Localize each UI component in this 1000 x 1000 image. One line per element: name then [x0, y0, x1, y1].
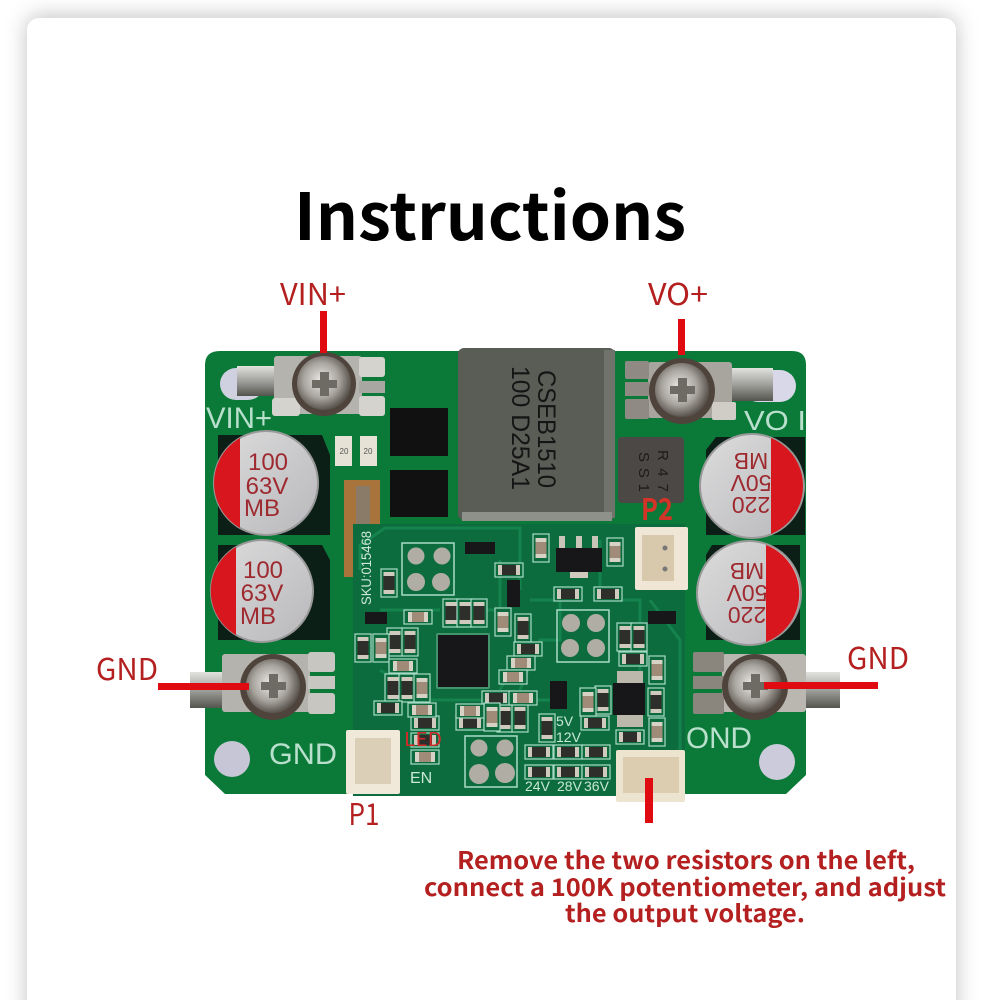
capacitor 100uF bottom: MB — [240, 603, 276, 630]
board voltage labels: 36V — [584, 778, 610, 794]
capacitor 100uF top: MB — [244, 495, 280, 522]
main inductor: 100 D25A1 — [506, 366, 534, 490]
pointer lines — [158, 311, 878, 823]
small resistors — [335, 436, 377, 466]
capacitor 220uF bottom: MB — [730, 558, 764, 584]
top-right screw terminal — [625, 358, 773, 424]
regulator — [556, 536, 602, 578]
copper traces — [360, 528, 680, 760]
bottom-right screw terminal — [693, 652, 840, 720]
note text: connect a 100K potentiometer, and adjust — [424, 868, 946, 903]
capacitor 100uF top: 63V — [246, 473, 288, 500]
top-left screw terminal — [237, 352, 385, 416]
SMD capacitors — [373, 534, 665, 764]
note text: Remove the two resistors on the left, — [457, 841, 915, 876]
daughter board — [353, 524, 685, 796]
connector bottom — [616, 750, 685, 802]
main IC — [436, 633, 490, 689]
labels: GND — [847, 634, 909, 678]
capacitor 220uF bottom: 220 — [728, 602, 766, 628]
silkscreen labels — [206, 402, 806, 771]
small resistors: 20 — [364, 447, 373, 456]
title: Instructions — [294, 165, 686, 259]
note text: the output voltage. — [565, 894, 805, 929]
labels: P2 — [641, 485, 673, 529]
small inductor — [618, 437, 684, 503]
labels: LED — [404, 725, 442, 752]
daughter board: SKU:015468 — [358, 531, 374, 605]
capacitor 100uF bottom — [211, 540, 330, 642]
note text — [424, 841, 946, 929]
main inductor: CSEB1510 — [532, 370, 560, 488]
silkscreen labels: GND — [269, 738, 337, 771]
board voltage labels — [410, 713, 610, 794]
circuit board — [190, 348, 840, 802]
capacitor 100uF bottom: 100 — [243, 557, 283, 584]
labels: VO+ — [648, 270, 708, 314]
MOSFETs — [390, 408, 448, 517]
connector P1 — [346, 730, 400, 794]
board voltage labels: 12V — [556, 729, 582, 745]
secondary IC — [613, 671, 645, 727]
labels: VIN+ — [280, 270, 346, 314]
solder joints — [402, 543, 609, 787]
labels — [96, 270, 909, 834]
mounting holes — [214, 368, 796, 780]
small resistors: 20 — [340, 447, 349, 456]
board voltage labels: EN — [410, 770, 432, 787]
labels: GND — [96, 645, 158, 689]
transistors — [365, 542, 676, 709]
capacitor 220uF bottom: 50V — [726, 580, 767, 606]
capacitor 220uF top: MB — [734, 448, 768, 474]
capacitor 220uF bottom — [697, 541, 801, 645]
copper pad — [344, 480, 380, 577]
capacitor 220uF top: 50V — [730, 470, 771, 496]
small inductor: SS1 — [635, 452, 652, 492]
small inductor: R47 — [654, 450, 671, 492]
silkscreen labels: VO I — [744, 405, 806, 436]
capacitor 100uF top: 100 — [248, 449, 288, 476]
connector P2 — [635, 527, 688, 590]
board voltage labels: 28V — [557, 778, 583, 794]
SMD resistors — [355, 563, 664, 779]
capacitor 220uF top: 220 — [732, 492, 770, 518]
capacitor 100uF top — [214, 431, 330, 535]
silkscreen labels: VIN+ — [206, 402, 272, 435]
capacitor 220uF top — [700, 434, 805, 538]
bottom-left screw terminal — [190, 652, 335, 720]
silkscreen labels: OND — [686, 722, 752, 755]
main inductor — [458, 348, 615, 521]
labels: P1 — [348, 790, 380, 834]
capacitor 100uF bottom: 63V — [241, 580, 283, 607]
board voltage labels: 24V — [525, 778, 551, 794]
board voltage labels: 5V — [556, 713, 574, 729]
